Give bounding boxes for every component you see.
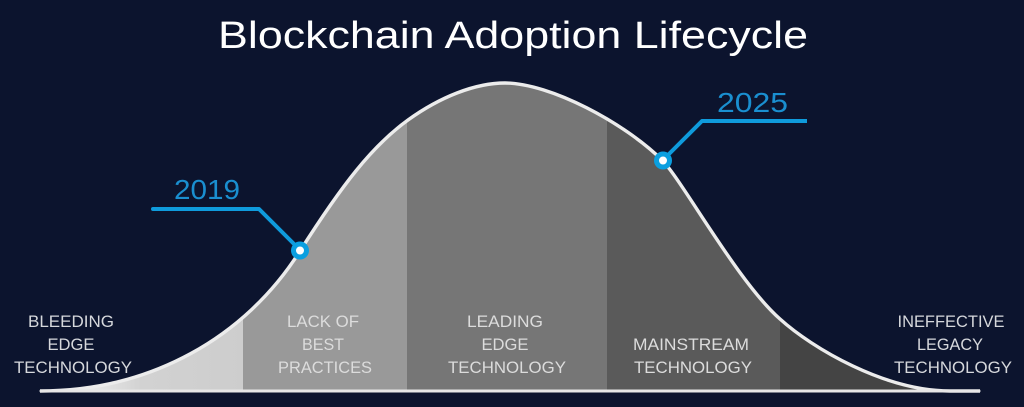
label: bleeding edge technology: BLEEDING	[28, 312, 114, 331]
curve segments	[87, 84, 917, 390]
label: mainstream technology: TECHNOLOGY	[634, 358, 752, 377]
label: leading edge technology: EDGE	[482, 335, 528, 354]
label: lack of best practices: BEST	[302, 335, 344, 354]
label: mainstream technology: MAINSTREAM	[633, 335, 749, 354]
callout: 2025: 2025	[717, 87, 788, 118]
label: lack of best practices: PRACTICES	[278, 358, 372, 377]
callout: 2019: 2019	[174, 174, 240, 205]
label: leading edge technology: LEADING	[467, 312, 543, 331]
callout: 2025	[656, 87, 807, 167]
baseline	[41, 390, 979, 392]
callout: 2019	[153, 174, 306, 257]
label: bleeding edge technology: EDGE	[48, 335, 94, 354]
label: ineffective legacy technology: INEFFECTIVE	[898, 312, 1004, 331]
title: Blockchain Adoption Lifecycle	[218, 15, 808, 57]
bell curve chart	[40, 80, 980, 392]
label: ineffective legacy technology: TECHNOLOGY	[894, 358, 1012, 377]
label: leading edge technology: TECHNOLOGY	[448, 358, 566, 377]
curve outline	[40, 83, 980, 391]
label: bleeding edge technology: TECHNOLOGY	[14, 358, 132, 377]
label: lack of best practices: LACK OF	[287, 312, 359, 331]
label: ineffective legacy technology: LEGACY	[917, 335, 983, 354]
